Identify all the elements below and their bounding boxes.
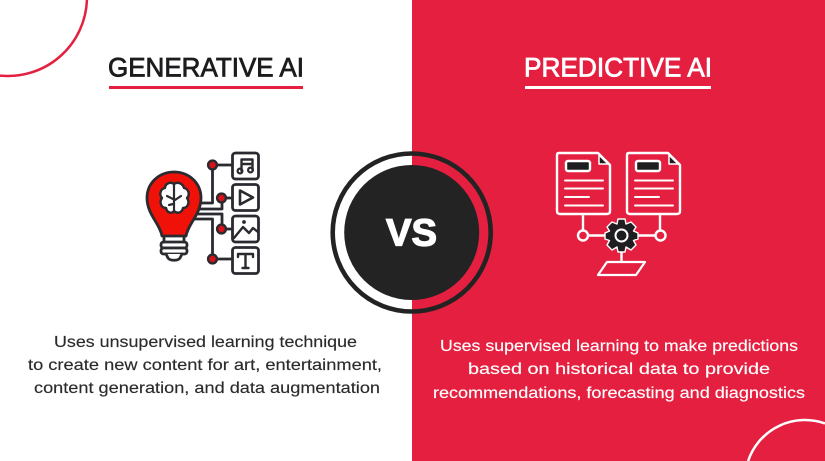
text: predictive AI description: recommendations, forecasting and diagnostics [433, 385, 805, 402]
corner arc: bottom right [748, 420, 825, 461]
panel: generative AI background [0, 0, 412, 461]
text: generative AI description: to create new content for art, entertainment, [28, 357, 382, 374]
bulb [147, 172, 201, 236]
corner arc: top left [0, 0, 87, 76]
VS badge: VS [386, 212, 437, 254]
heading: predictive AI: PREDICTIVE AI [524, 52, 712, 82]
connectors [583, 215, 660, 261]
VS badge [333, 154, 491, 312]
heading: generative AI: GENERATIVE AI [108, 52, 304, 82]
music note [242, 160, 252, 171]
document left [557, 153, 610, 214]
text: predictive AI description: based on historical data to provide [468, 361, 770, 378]
connector nodes [208, 161, 226, 263]
connectors [201, 165, 212, 203]
media boxes [232, 153, 258, 179]
bulb base [161, 237, 187, 260]
text: generative AI description: Uses unsupervised learning technique [54, 334, 357, 351]
play triangle [240, 190, 253, 204]
gear [605, 219, 638, 252]
brain [160, 183, 189, 213]
image [234, 227, 258, 238]
text: generative AI description [28, 334, 382, 397]
text: predictive AI description: Uses supervised learning to make predictions [440, 338, 798, 355]
output parallelogram [598, 262, 645, 275]
icon: light bulb with brain connected to media [147, 153, 258, 274]
letter T glyph frame [238, 254, 253, 268]
icon: documents, gear and data output [557, 153, 680, 275]
text: generative AI description: content generation, and data augmentation [34, 380, 380, 397]
document right [627, 153, 680, 214]
panel: predictive AI background [412, 0, 825, 461]
text: predictive AI description [433, 338, 805, 402]
